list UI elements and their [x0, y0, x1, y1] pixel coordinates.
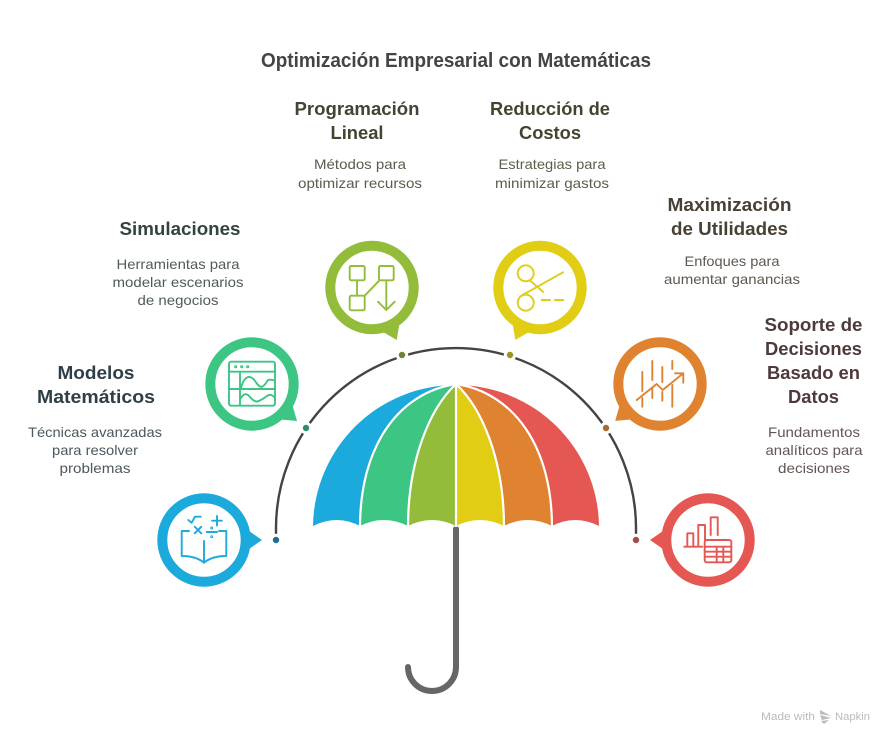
canopy panel: blue: [313, 385, 456, 526]
arc connection dots: [271, 350, 641, 545]
heading: [764, 315, 862, 407]
heading: Costos: [519, 123, 581, 143]
dot: blue: [271, 535, 281, 545]
title: Optimización Empresarial con Matemáticas: [261, 50, 651, 72]
icon: blue bubble with open book and math symbols: [162, 498, 262, 582]
description: aumentar ganancias: [664, 271, 800, 287]
description: Fundamentos: [768, 424, 860, 440]
icon: yellow bubble with scissors: [498, 246, 582, 344]
panel: Reducción de Costos text: [490, 99, 610, 191]
heading: Datos: [788, 387, 839, 407]
description: [664, 253, 800, 287]
heading: Matemáticos: [37, 387, 155, 407]
icon: lime bubble with flow diagram: [330, 246, 414, 344]
description: [766, 424, 863, 476]
heading: Soporte de: [764, 315, 862, 335]
heading: Maximización: [668, 195, 792, 215]
canopy panel: green: [360, 385, 456, 526]
panel: Modelos Matemáticos text: [28, 363, 162, 476]
umbrella handle: [408, 529, 456, 691]
description: [298, 156, 422, 191]
heading: [490, 99, 610, 143]
description: optimizar recursos: [298, 175, 422, 191]
description: [495, 156, 609, 191]
heading: [37, 363, 155, 407]
heading: Basado en: [767, 363, 860, 383]
description: para resolver: [52, 442, 138, 458]
description: analíticos para: [766, 442, 863, 458]
heading: de Utilidades: [671, 219, 788, 239]
canopy panel: red: [456, 385, 599, 526]
description: Enfoques para: [684, 253, 780, 269]
dot: yellow: [505, 350, 515, 360]
panel: Simulaciones text: [112, 219, 244, 308]
description: Estrategias para: [498, 156, 606, 172]
description: Herramientas para: [116, 256, 240, 272]
canopy ribs: [360, 384, 552, 527]
panel: Maximización de Utilidades text: [664, 195, 800, 287]
icon: orange bubble with rising chart: [609, 342, 702, 428]
panel: Programación Lineal text: [294, 99, 422, 191]
arc over the umbrella: [276, 348, 636, 535]
panel: Soporte de Decisiones text: [764, 315, 863, 476]
description: decisiones: [778, 460, 850, 476]
description: [28, 424, 162, 476]
description: [112, 256, 244, 308]
watermark: Napkin: [835, 711, 870, 723]
heading: Reducción de: [490, 99, 610, 119]
description: minimizar gastos: [495, 175, 609, 191]
heading: Lineal: [330, 123, 384, 143]
description: Técnicas avanzadas: [28, 424, 162, 440]
umbrella canopy: [313, 384, 599, 527]
canopy panel: yellow: [456, 385, 504, 526]
canopy panel: orange: [456, 385, 552, 526]
heading: Decisiones: [765, 339, 862, 359]
heading: Simulaciones: [120, 219, 240, 239]
dot: red: [631, 535, 641, 545]
heading: [294, 99, 420, 143]
heading: Modelos: [58, 363, 134, 383]
icon: red bubble with bars and table: [650, 498, 750, 582]
heading: [668, 195, 792, 239]
description: modelar escenarios: [112, 274, 244, 290]
canopy panel: lime: [408, 385, 456, 526]
description: problemas: [60, 460, 130, 476]
dot: orange: [601, 423, 611, 433]
description: de negocios: [138, 292, 218, 308]
dot: lime: [397, 350, 407, 360]
watermark: [761, 710, 870, 724]
heading: Programación: [294, 99, 420, 119]
icon: green bubble with simulation window: [210, 342, 303, 428]
dot: green: [301, 423, 311, 433]
watermark: Made with: [761, 711, 815, 723]
description: Métodos para: [314, 156, 406, 172]
